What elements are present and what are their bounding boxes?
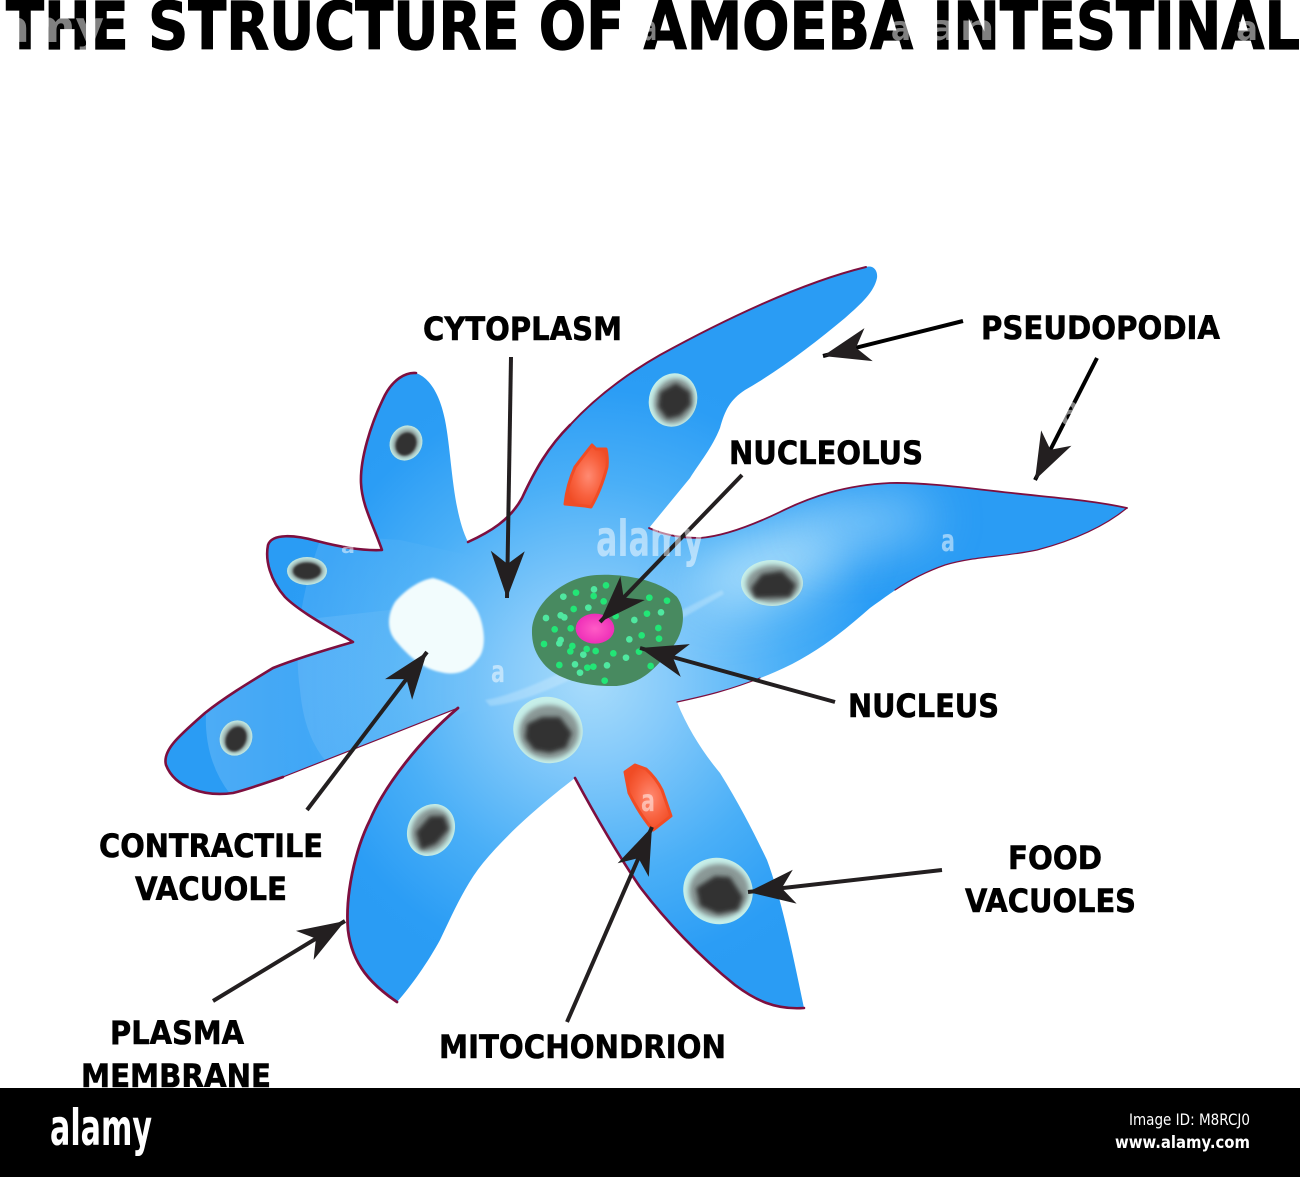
- label: pseudopodia: PSEUDOPODIA: [981, 309, 1220, 347]
- arrow: nucleolus: [600, 475, 742, 622]
- label: plasma membrane: [81, 1014, 271, 1095]
- label: contractile vacuole: VACUOLE: [135, 870, 287, 908]
- amoeba cell: [165, 267, 1127, 1008]
- watermark: amy: [0, 2, 104, 53]
- label: food vacuoles: VACUOLES: [965, 882, 1136, 920]
- food vacuole 3: [741, 560, 803, 606]
- image id: Image ID: M8RCJ0: [1129, 1110, 1250, 1129]
- watermark: an: [925, 8, 995, 49]
- website: www.alamy.com: [1115, 1133, 1250, 1153]
- arrow: plasma membrane: [213, 921, 345, 1001]
- chromatin dots: [541, 582, 670, 684]
- watermark: a: [341, 537, 355, 558]
- label: nucleolus: NUCLEOLUS: [729, 434, 923, 472]
- watermark: [0, 2, 1258, 819]
- watermark: a: [491, 655, 505, 690]
- label: food vacuoles: [965, 839, 1136, 920]
- nucleus: [532, 575, 683, 686]
- arrow: mitochondrion: [567, 827, 652, 1022]
- footer bar: [0, 1088, 1300, 1177]
- watermark: a: [1060, 388, 1080, 434]
- watermark: a: [941, 524, 955, 559]
- arrow: cytoplasm: [507, 357, 511, 598]
- food vacuole 1: [642, 367, 704, 433]
- watermark: a: [641, 784, 655, 819]
- food vacuole 8: [674, 848, 762, 934]
- arrow: nucleus: [640, 648, 835, 702]
- food vacuole 7: [398, 795, 464, 865]
- arrow: pseudopodia lower: [1035, 358, 1097, 480]
- label: contractile vacuole: [99, 827, 323, 908]
- watermark: alamy: [596, 510, 704, 568]
- label: cytoplasm: CYTOPLASM: [423, 310, 622, 348]
- food vacuole 2: [383, 420, 429, 466]
- watermark: a: [891, 9, 911, 49]
- arrow: contractile vacuole: [307, 652, 427, 810]
- food vacuole 4: [287, 557, 327, 585]
- label: food vacuoles: FOOD: [1008, 839, 1102, 877]
- watermark: a: [1236, 9, 1258, 49]
- plasma membrane outline: [165, 267, 1127, 1008]
- food vacuole 5: [214, 715, 258, 761]
- footer logo: alamy: [50, 1099, 152, 1157]
- label: plasma membrane: PLASMA: [110, 1014, 244, 1052]
- contractile vacuole: [389, 578, 484, 674]
- mitochondrion 2: [625, 765, 671, 830]
- food vacuole 6: [504, 687, 592, 773]
- label: contractile vacuole: CONTRACTILE: [99, 827, 323, 865]
- cell body fill: [165, 267, 1127, 1008]
- label: mitochondrion: MITOCHONDRION: [439, 1028, 726, 1066]
- cell highlights: [206, 491, 937, 800]
- label: plasma membrane: MEMBRANE: [81, 1057, 271, 1095]
- nucleolus: [576, 614, 614, 644]
- arrow: food vacuoles: [748, 870, 942, 892]
- label: nucleus: NUCLEUS: [848, 687, 999, 725]
- mitochondrion 1: [565, 445, 607, 507]
- arrow: pseudopodia upper: [823, 321, 963, 356]
- watermark: a: [643, 9, 657, 49]
